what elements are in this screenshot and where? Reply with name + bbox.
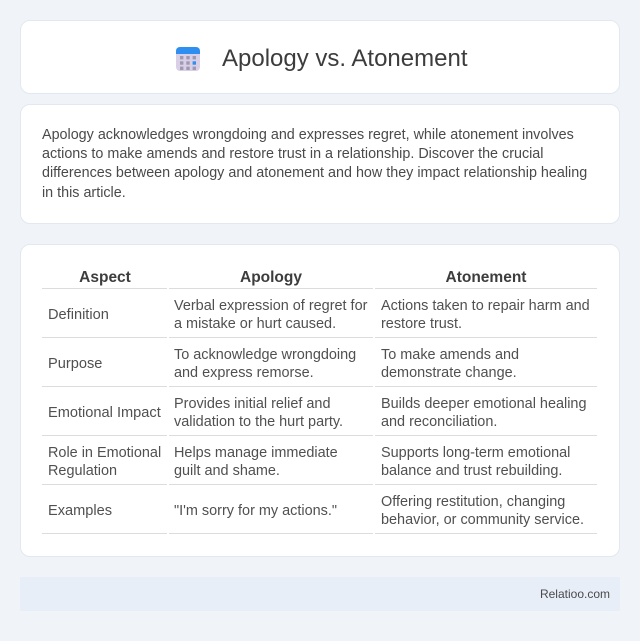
column heading: Apology: Apology [240, 269, 302, 286]
footer source text: Relatioo.com [540, 587, 610, 601]
Atonement purpose: To make amends and [381, 347, 519, 363]
Atonement emotional impact [381, 396, 586, 430]
Atonement emotional impact: and reconciliation. [381, 414, 497, 430]
Atonement role in regulation: Supports long-term emotional [381, 445, 570, 461]
Atonement definition [381, 298, 590, 332]
Atonement definition: restore trust. [381, 316, 462, 332]
row: Role in Emotional Regulation: Role in Emotional [48, 445, 161, 461]
Apology emotional impact [174, 396, 343, 430]
Apology emotional impact: Provides initial relief and [174, 396, 330, 412]
title: Apology vs. Atonement [222, 45, 467, 72]
footer bar [20, 577, 620, 611]
Atonement role in regulation [381, 445, 570, 479]
panel: comparison table [20, 244, 620, 557]
Apology definition: Verbal expression of regret for [174, 298, 367, 314]
Apology role in regulation [174, 445, 338, 479]
Apology examples: "I'm sorry for my actions." [174, 503, 337, 519]
Apology role in regulation: Helps manage immediate [174, 445, 338, 461]
row: Role in Emotional Regulation: Regulation [48, 463, 117, 479]
Atonement emotional impact: Builds deeper emotional healing [381, 396, 586, 412]
Atonement examples: behavior, or community service. [381, 512, 584, 528]
row: Examples: Examples [48, 503, 112, 519]
Atonement examples [381, 494, 584, 528]
row: Emotional Impact: Emotional Impact [48, 405, 161, 421]
column heading: Aspect: Aspect [79, 269, 131, 286]
Atonement purpose [381, 347, 519, 381]
icon: calendar [176, 47, 200, 71]
column heading: Atonement: Atonement [446, 269, 526, 286]
Apology emotional impact: validation to the hurt party. [174, 414, 343, 430]
Atonement examples: Offering restitution, changing [381, 494, 565, 510]
panel: introduction: Apology acknowledges wrongdoing and expresses regret, while atonement involves [42, 127, 574, 143]
panel: introduction: differences between apology and atonement and how they impact relationship healing [42, 165, 587, 181]
panel: title header [20, 20, 620, 94]
Apology definition [174, 298, 368, 332]
row: Role in Emotional Regulation [48, 445, 161, 479]
Apology purpose [174, 347, 356, 381]
Atonement purpose: demonstrate change. [381, 365, 517, 381]
row: Definition: Definition [48, 307, 109, 323]
panel: introduction [20, 104, 620, 224]
Apology purpose: and express remorse. [174, 365, 314, 381]
Apology definition: a mistake or hurt caused. [174, 316, 336, 332]
panel: introduction: actions to make amends and restore trust in a relationship. Discover the crucial [42, 146, 543, 162]
Atonement definition: Actions taken to repair harm and [381, 298, 590, 314]
row: Purpose: Purpose [48, 356, 102, 372]
Atonement role in regulation: balance and trust rebuilding. [381, 463, 562, 479]
Apology role in regulation: guilt and shame. [174, 463, 280, 479]
text block: introduction [42, 127, 587, 201]
Apology purpose: To acknowledge wrongdoing [174, 347, 356, 363]
panel: introduction: in this article. [42, 185, 126, 201]
